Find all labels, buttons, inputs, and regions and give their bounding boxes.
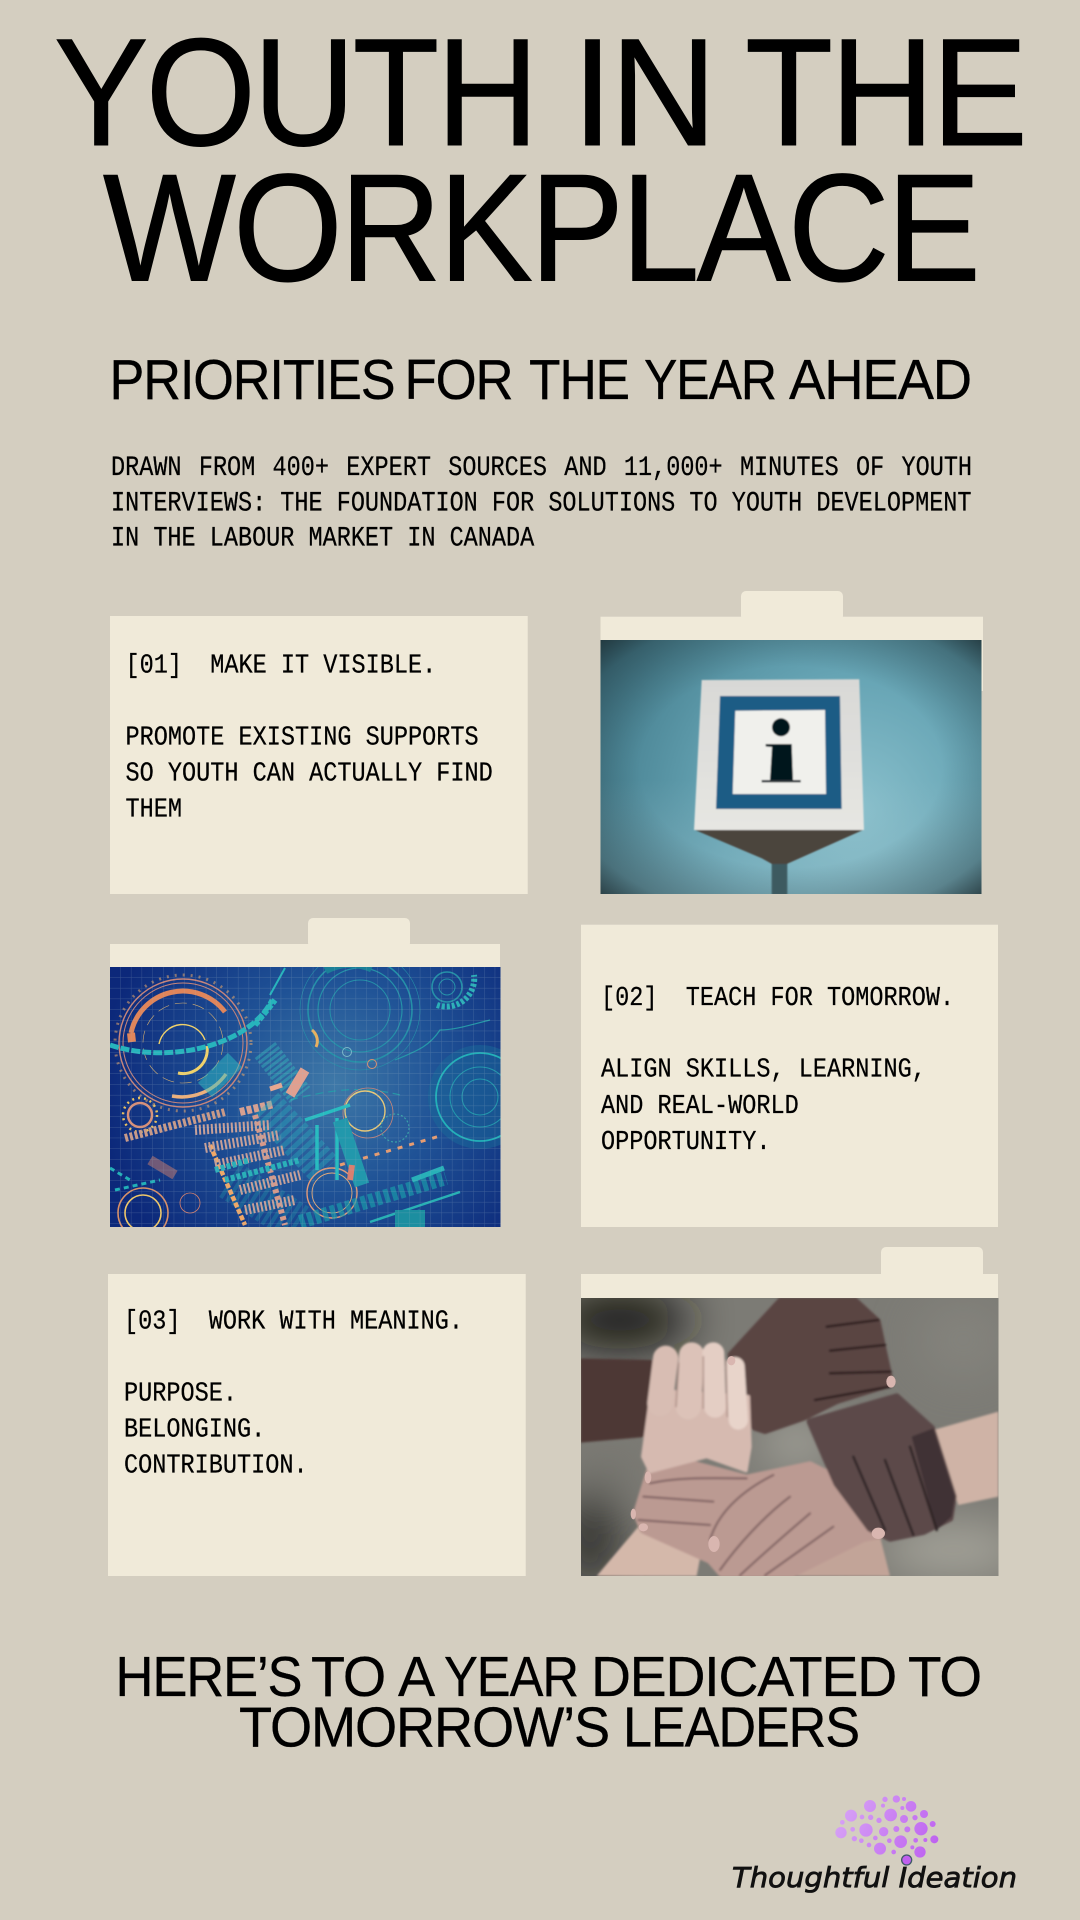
panel: information sign image folder — [600, 591, 983, 895]
lower-left arm — [597, 1527, 700, 1576]
teal sweep — [110, 1000, 272, 1053]
light arm right — [933, 1412, 998, 1505]
subtitle — [110, 348, 971, 412]
intro paragraph: DRAWN FROM 400+ EXPERT SOURCES AND 11,000+ MINUTES OF YOUTH — [111, 451, 972, 484]
rack left — [125, 1112, 225, 1138]
text: priority 01 description: SO YOUTH CAN ACTUALLY FIND — [126, 758, 493, 789]
title: THE — [745, 7, 1025, 178]
closing statement: LEADERS — [623, 1696, 859, 1760]
closing statement: TOMORROW’S — [239, 1696, 609, 1760]
text: priority 03 description: PURPOSE. — [124, 1378, 237, 1409]
top gear — [308, 958, 412, 1062]
text: priority 01 description — [126, 722, 493, 825]
heading: priority 03: [03] WORK WITH MEANING. — [124, 1306, 463, 1337]
title: YOUTH — [54, 7, 536, 178]
icon: brain of dots — [835, 1795, 938, 1865]
closing statement: DEDICATED — [591, 1645, 896, 1709]
bottom centre gear — [307, 1168, 357, 1218]
subtitle: YEAR — [644, 348, 776, 412]
text: priority 03 description: CONTRIBUTION. — [124, 1450, 308, 1481]
big orange gear — [119, 979, 247, 1107]
title — [54, 7, 1025, 314]
mid orange arc — [312, 1030, 317, 1047]
heading: priority 02: [02] TEACH FOR TOMORROW. — [601, 983, 954, 1014]
text: priority 02 description: ALIGN SKILLS, LEARNING, — [601, 1054, 926, 1085]
panel: gears blueprint image folder — [110, 918, 500, 1227]
panel: priority 02 text card — [581, 925, 998, 1227]
dark hand right — [810, 1397, 953, 1538]
fingernails — [886, 1376, 896, 1388]
light hand — [643, 1390, 750, 1472]
top right gear — [432, 972, 462, 1002]
panel: priority 01 text card — [110, 616, 528, 894]
text: priority 03 description: BELONGING. — [124, 1414, 265, 1445]
text: priority 03 description — [124, 1378, 308, 1481]
image: information sign — [600, 640, 982, 895]
intro paragraph: INTERVIEWS: THE FOUNDATION FOR SOLUTIONS TO YOUTH DEVELOPMENT — [111, 487, 972, 519]
intro paragraph: IN THE LABOUR MARKET IN CANADA — [111, 522, 535, 554]
dark arm left — [581, 1358, 657, 1443]
logo: Thoughtful Ideation — [732, 1795, 1017, 1894]
small top-left gear — [128, 1103, 152, 1127]
yellow ring — [345, 1091, 385, 1131]
teal rack bottom — [300, 1178, 446, 1222]
subtitle: AHEAD — [789, 348, 971, 412]
image: joined hands — [581, 1298, 998, 1576]
title: IN — [572, 7, 714, 178]
text: priority 02 description: AND REAL-WORLD — [601, 1091, 799, 1122]
wordmark: Thoughtful Ideation — [732, 1861, 1017, 1894]
closing statement — [116, 1645, 981, 1760]
title: WORKPLACE — [103, 142, 978, 314]
right gear — [428, 1045, 500, 1149]
lower hand — [637, 1463, 882, 1573]
intro paragraph — [111, 451, 972, 554]
closing statement: HERE’S — [116, 1645, 302, 1709]
closing statement: TO — [908, 1645, 981, 1709]
panel: joined hands image folder — [581, 1247, 998, 1576]
subtitle: THE — [529, 348, 629, 412]
heading: priority 01: [01] MAKE IT VISIBLE. — [126, 650, 436, 681]
teal structure — [305, 1105, 350, 1180]
panel: priority 03 text card — [108, 1274, 526, 1576]
subtitle: PRIORITIES — [110, 348, 394, 412]
text: priority 02 description — [601, 1054, 926, 1158]
text: priority 02 description: OPPORTUNITY. — [601, 1127, 771, 1158]
dark hand top — [732, 1302, 890, 1430]
text: priority 01 description: PROMOTE EXISTING SUPPORTS — [126, 722, 479, 753]
central column — [210, 1145, 245, 1225]
image: gears blueprint — [110, 967, 500, 1227]
closing statement: YEAR — [444, 1645, 578, 1709]
bottom-left gear — [117, 1187, 169, 1227]
bottom arm — [783, 1537, 890, 1576]
text: priority 01 description: THEM — [126, 794, 182, 825]
closing statement: TO — [311, 1645, 385, 1709]
chain — [340, 1136, 440, 1165]
closing statement: A — [398, 1645, 435, 1709]
subtitle: FOR — [404, 348, 512, 412]
